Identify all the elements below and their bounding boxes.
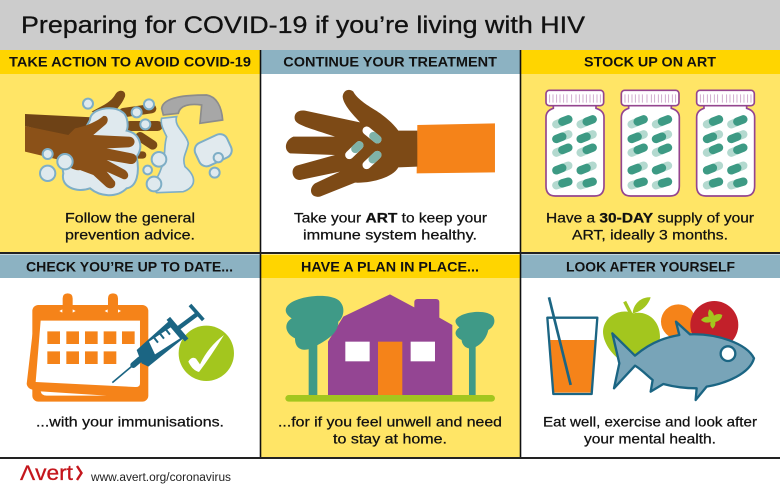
- heading: take action: TAKE ACTION TO AVOID COVID-19: [9, 54, 251, 70]
- text: unwell: ...for if you feel unwell and need: [278, 414, 502, 430]
- heading: continue treatment: CONTINUE YOUR TREATMENT: [283, 54, 497, 70]
- text: eat well: Eat well, exercise and look after: [543, 414, 757, 430]
- logo: Avert: Λvert: [20, 462, 73, 485]
- panel: continue treatment: [260, 50, 520, 252]
- icon: tick: [179, 326, 234, 381]
- panel: take action: [0, 50, 260, 252]
- text: prevention advice: [65, 210, 195, 242]
- icon: house and trees: [285, 294, 495, 402]
- panel: look after yourself: [520, 254, 780, 457]
- panel: plan in place: [260, 254, 520, 457]
- title bar: [0, 0, 780, 50]
- icon: juice glass: [547, 297, 597, 394]
- icon: fruit and fish: [603, 297, 754, 400]
- icon: syringe: [112, 305, 203, 383]
- heading: check up to date: CHECK YOU’RE UP TO DATE...: [26, 258, 233, 274]
- text: 30-day supply: ART, ideally 3 months.: [572, 226, 728, 242]
- url: www.avert.org/coronavirus: [90, 472, 231, 484]
- text: immunisations: ...with your immunisations.: [36, 414, 224, 430]
- icon: hand holding pills: [286, 90, 495, 197]
- heading: plan in place: HAVE A PLAN IN PLACE...: [301, 258, 479, 274]
- panel: check up to date: [0, 254, 260, 457]
- title bar: Preparing for COVID-19 if you’re living with HIV: [21, 12, 585, 39]
- text: take your art: Take your ART to keep your: [294, 210, 487, 226]
- text: unwell: [278, 414, 502, 446]
- footer: [20, 462, 231, 485]
- text: eat well: [543, 414, 757, 446]
- text: take your art: [294, 210, 487, 242]
- text: 30-day supply: Have a 30-DAY supply of your: [546, 210, 754, 226]
- icon: calendar: [27, 293, 148, 402]
- heading: stock up: STOCK UP ON ART: [584, 54, 716, 70]
- heading: look after yourself: LOOK AFTER YOURSELF: [566, 258, 735, 274]
- text: unwell: to stay at home.: [333, 430, 447, 446]
- text: eat well: your mental health.: [584, 430, 716, 446]
- panel: stock up on art: [520, 50, 780, 252]
- icon: washing hands: [25, 91, 234, 195]
- text: 30-day supply: [546, 210, 754, 242]
- icon: pill jars: [546, 90, 755, 196]
- text: take your art: immune system healthy.: [303, 226, 477, 242]
- text: prevention advice: Follow the general: [65, 210, 195, 226]
- text: prevention advice: prevention advice.: [65, 226, 195, 242]
